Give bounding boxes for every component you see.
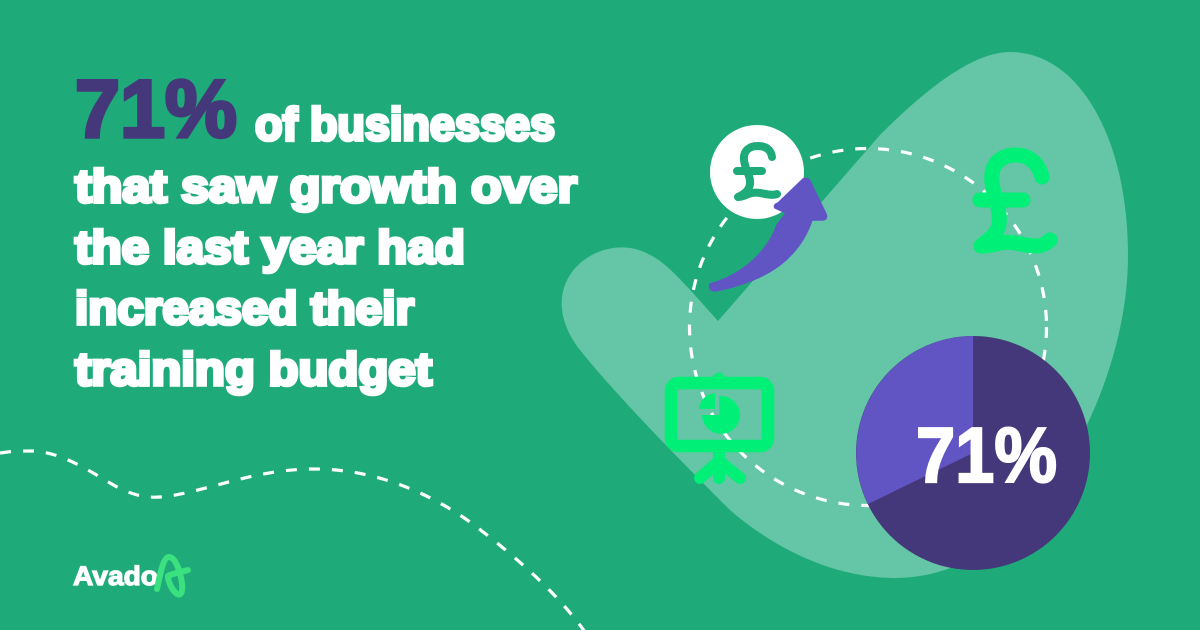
pie label: 71% [916,411,1057,499]
heading statistic: 71%: 71% [75,64,237,155]
heading line 1: of businesses [255,98,555,150]
heading line 5: training budget [75,343,432,395]
heading line 3: the last year had [75,221,465,273]
dashed circle [690,148,1046,506]
heading [75,64,577,395]
dashed wave line [0,451,585,630]
pie chart: 71% [856,336,1090,570]
icon: growth arrow [710,178,826,291]
icon: presentation board [671,372,768,478]
heading line 4: increased their [75,282,414,334]
logo mark [157,557,188,595]
logo: Avado [73,557,188,595]
logo: Avado: Avado [73,561,158,591]
icon: pound coin [710,125,804,219]
icon: large green pound [980,155,1050,246]
heading line 2: that saw growth over [75,160,577,212]
background blob: tick shape [562,52,1128,578]
